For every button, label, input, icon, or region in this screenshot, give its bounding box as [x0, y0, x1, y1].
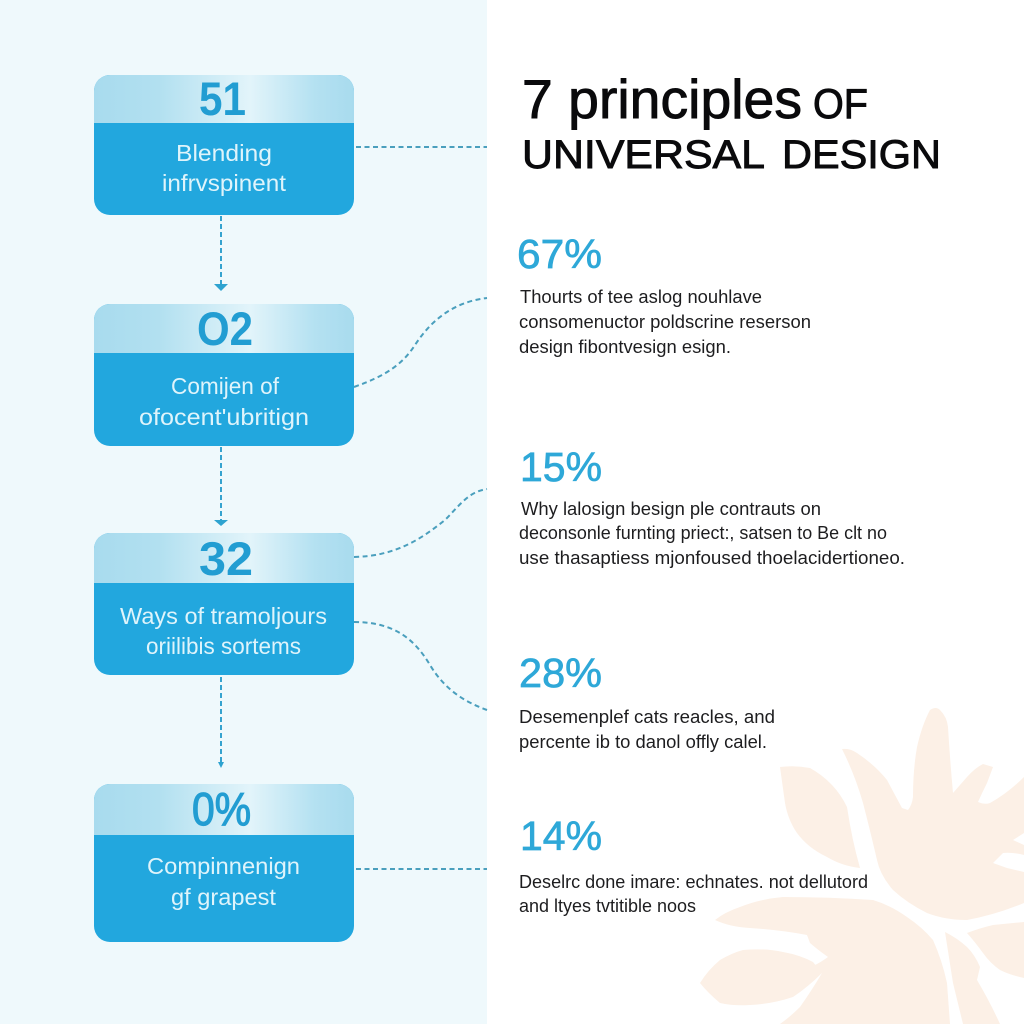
stat: 15%: 15% [520, 444, 602, 490]
stat 14% description [519, 872, 868, 916]
card 2 label: ofocent'ubritign [139, 404, 309, 430]
card 1 label [162, 140, 287, 196]
card 4 label: Compinnenign [147, 853, 300, 879]
card 4 number: 0% [192, 783, 251, 835]
stat: 28% [519, 650, 775, 752]
title: 7 principles [522, 68, 802, 130]
title: UNIVERSAL [522, 133, 765, 177]
left background panel [0, 0, 487, 1024]
card 3 label: oriilibis sortems [146, 633, 301, 659]
arrow: card 3 to card 4 [218, 677, 224, 768]
card 2 label [139, 373, 309, 430]
card 4: Compinnenign [94, 783, 354, 942]
stat 14% description: and ltyes tvtitible noos [519, 896, 696, 916]
stat 28% description: percente ib to danol offly calel. [519, 732, 767, 752]
card 3: Ways of tramoljours [94, 532, 354, 675]
arrow: card 2 to card 3 [214, 447, 228, 526]
card 1 number: 51 [199, 72, 246, 125]
card 1: Blending [94, 72, 354, 215]
decorative peach flower [700, 708, 1024, 1024]
title: OF [813, 80, 868, 127]
card 3 label [120, 603, 327, 659]
stat 67% description: Thourts of tee aslog nouhlave [520, 287, 762, 307]
stat 67% description: design fibontvesign esign. [519, 337, 731, 357]
connector: card 2 to 67% [354, 298, 487, 387]
connector: card 4 to right column [356, 868, 487, 870]
stat: 28%: 28% [519, 650, 602, 696]
connector: card 3 to 15% [354, 489, 487, 557]
connector: card 3 to 28% [354, 622, 487, 710]
card 2 number: O2 [197, 302, 253, 355]
stat 67% description: consomenuctor poldscrine reserson [519, 312, 811, 332]
stat: 15% [519, 444, 905, 568]
stat 15% description [519, 499, 905, 568]
card 1 label: Blending [176, 140, 272, 166]
right background panel [487, 0, 1024, 1024]
card 2 label: Comijen of [171, 373, 280, 399]
title [522, 68, 941, 177]
title: DESIGN [782, 133, 941, 177]
stat 15% description: deconsonle furnting priect:, satsen to Be clt no [519, 523, 887, 543]
stat 67% description [519, 287, 811, 357]
stat: 67%: 67% [517, 231, 602, 277]
card 3 number: 32 [199, 532, 253, 585]
card 4 label [147, 853, 300, 910]
card 2: Comijen of [94, 302, 354, 446]
stat 15% description: use thasaptiess mjonfoused thoelacidertioneo. [519, 548, 905, 568]
stat 28% description [519, 707, 775, 752]
arrow: card 1 to card 2 [214, 216, 228, 291]
card 1 label: infrvspinent [162, 170, 287, 196]
stat 14% description: Deselrc done imare: echnates. not dellutord [519, 872, 868, 892]
stat: 14%: 14% [520, 813, 602, 859]
stat 15% description: Why lalosign besign ple contrauts on [521, 499, 821, 519]
stat: 14% [519, 813, 868, 916]
card 4 label: gf grapest [171, 884, 277, 910]
card 3 label: Ways of tramoljours [120, 603, 327, 629]
stat 28% description: Desemenplef cats reacles, and [519, 707, 775, 727]
connector: card 1 to right column [356, 146, 487, 148]
stat: 67% [517, 231, 811, 357]
